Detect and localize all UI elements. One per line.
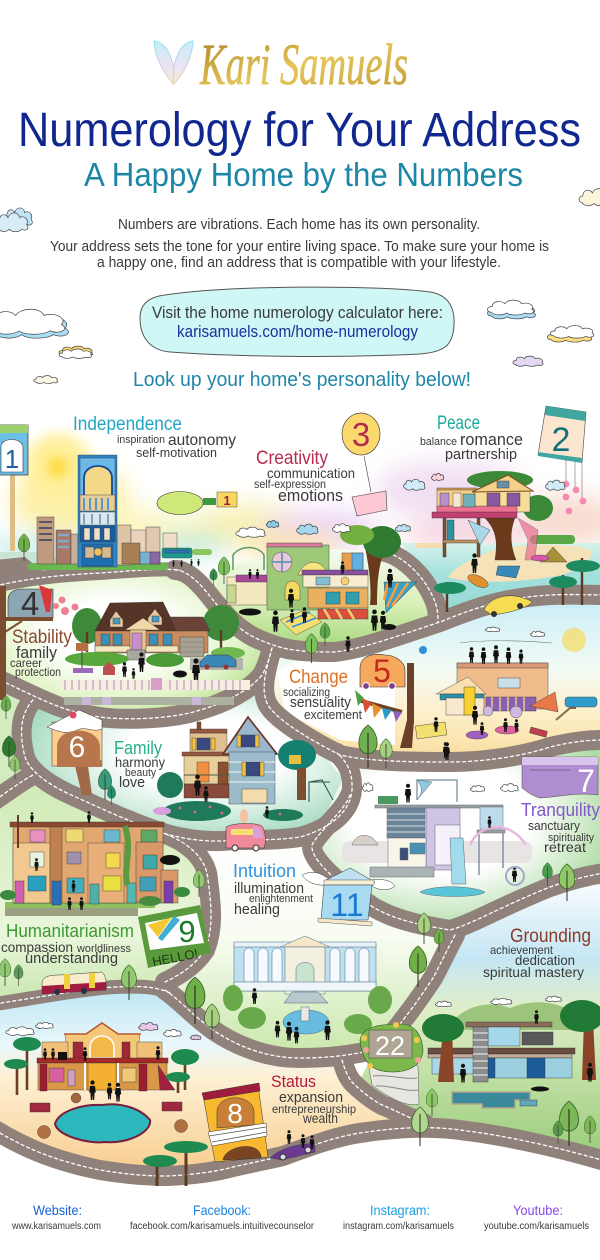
label: stability: [10, 627, 72, 679]
footer: instagram: [343, 1202, 454, 1232]
palace: intuition: [234, 936, 376, 1034]
label: peace: Peace: [437, 413, 480, 434]
trees and silhouettes: grounding: [412, 996, 600, 1146]
map: land patches: [0, 543, 600, 1176]
patch: grounding: [360, 873, 600, 1161]
trees: tranquility: [543, 863, 575, 901]
blimp with banner 1: 1: [223, 493, 231, 508]
label: grounding: dedication: [515, 952, 575, 968]
footer: website: Website:: [33, 1202, 82, 1218]
intro text: Numbers are vibrations. Each home has its own personality.: [118, 216, 480, 233]
island and tree house: peace: [415, 471, 591, 582]
sign 22: wreath and rock: [360, 1022, 423, 1105]
house: creativity: [227, 543, 417, 619]
sign 9: hello: HELLO!: [151, 946, 199, 969]
logo: Kari Samuels: [154, 32, 408, 97]
label: family: beauty: [125, 767, 156, 779]
label: intuition: Intuition: [233, 861, 296, 881]
label: status: Status: [271, 1072, 316, 1091]
patch: city ground: [0, 552, 180, 585]
sign 2: calendar: 2: [552, 421, 570, 459]
garden: intuition: [223, 985, 392, 1043]
callout: calculator link: karisamuels.com/home-numerology: [177, 322, 418, 341]
callout: calculator link: Visit the home numerology calculator here:: [152, 303, 443, 322]
label: independence: self-motivation: [136, 445, 217, 460]
tree: creativity: [340, 525, 401, 605]
footer: youtube: [484, 1202, 589, 1232]
patch: change white corner: [278, 657, 395, 745]
label: independence: [73, 414, 236, 460]
sign 11: winged columns: 11: [330, 887, 364, 923]
footer: facebook: facebook.com/karisamuels.intuitivecounselor: [130, 1221, 315, 1232]
label: tranquility: [521, 800, 600, 855]
label: change: [283, 667, 362, 722]
label: independence: Independence: [73, 414, 182, 435]
footer: website: www.karisamuels.com: [11, 1221, 101, 1232]
label: humanitarianism: compassion: [1, 939, 73, 955]
city: independence tower and buildings: [28, 455, 212, 570]
label: tranquility: spirituality: [548, 832, 594, 844]
roads: [0, 551, 600, 1176]
footer: instagram: instagram.com/karisamuels: [343, 1221, 454, 1232]
silhouettes and decor: change party: [419, 627, 586, 760]
label: change: excitement: [304, 707, 362, 722]
house: tranquility: [342, 780, 532, 896]
label: intuition: [233, 861, 313, 918]
label: independence: autonomy: [168, 432, 236, 449]
house: stability: [72, 602, 239, 660]
clouds in the sky: [0, 189, 600, 383]
callout: calculator link: [140, 287, 454, 356]
footer: links: [11, 1202, 589, 1232]
sign 8: status tower: 8: [227, 1098, 243, 1129]
patch: humanitarian: [0, 775, 208, 1004]
trees: left edge: [1, 696, 20, 779]
picnic mat and people: [239, 561, 396, 652]
logo wordmark: Kari Samuels: [199, 32, 408, 97]
sign 6: family: [47, 710, 102, 795]
label: grounding: spiritual mastery: [483, 964, 584, 980]
house: grounding: [428, 1002, 575, 1108]
label: grounding: Grounding: [510, 926, 591, 947]
bunting flags: [355, 690, 402, 722]
label: status: [271, 1072, 356, 1126]
sign 5: camper: 5: [373, 653, 391, 689]
label: family: Family: [114, 738, 162, 758]
label: grounding: [483, 926, 591, 980]
intro text: Your address sets the tone for your entire living space. To make sure your home is: [50, 238, 549, 255]
label: humanitarianism: worldliness: [76, 943, 131, 955]
sign 11: winged columns: [302, 868, 395, 926]
label: change: sensuality: [290, 694, 351, 711]
label: humanitarianism: understanding: [25, 950, 118, 967]
sign 4: mailbox: 4: [21, 585, 39, 622]
footer: youtube: youtube.com/karisamuels: [484, 1221, 589, 1232]
house: change: [415, 663, 597, 739]
label: change: Change: [289, 667, 348, 688]
label: peace: romance: [460, 430, 523, 449]
sign 1: post: [0, 425, 28, 551]
bus: [42, 972, 106, 995]
label: stability: protection: [15, 665, 61, 679]
label: creativity: self-expression: [254, 477, 326, 491]
label: status: entrepreneurship: [272, 1102, 356, 1116]
cyclist: [443, 742, 448, 758]
label: family: harmony: [115, 754, 165, 770]
palms and silhouettes: peace: [434, 553, 600, 612]
trees: change: [359, 725, 392, 768]
label: independence: inspiration: [117, 434, 165, 446]
sign 6: family: 6: [69, 731, 85, 764]
footer: facebook: [130, 1202, 315, 1232]
blimp with banner 1: [157, 492, 237, 514]
label: family: [114, 738, 165, 791]
sign 9: hello: 9: [178, 914, 196, 949]
intro text: [50, 216, 549, 271]
patch: family: [25, 690, 352, 842]
label: intuition: enlightenment: [249, 893, 313, 905]
label: peace: [420, 413, 523, 463]
sign 3: balloon and envelope: [342, 413, 387, 516]
label: stability: family: [16, 643, 57, 662]
patch: peace sea: [400, 543, 600, 622]
building: humanitarian: [5, 815, 178, 908]
sun: [24, 433, 92, 501]
house: family: [182, 717, 277, 804]
trees: creativity: [210, 557, 330, 663]
fence: [60, 678, 250, 690]
label: creativity: communication: [267, 465, 355, 481]
subtitle: A Happy Home by the Numbers: [84, 156, 523, 193]
label: peace: partnership: [445, 446, 517, 463]
patch: tranquility: [312, 740, 600, 930]
label: grounding: achievement: [490, 943, 554, 957]
label: creativity: [254, 448, 355, 505]
silhouettes: city walkers: [172, 559, 200, 567]
tree: city: [18, 534, 30, 561]
garden and car: stability: [60, 643, 250, 705]
label: creativity: Creativity: [256, 448, 328, 469]
ice-cream van: [226, 809, 265, 851]
sign 9: hello: [138, 905, 211, 969]
sign 2: calendar: [538, 406, 586, 514]
patch: change: [268, 595, 600, 762]
sign 5: camper: [355, 653, 414, 748]
label: tranquility: sanctuary: [528, 818, 580, 833]
label: change: socializing: [283, 687, 330, 699]
label: tranquility: retreat: [544, 839, 586, 855]
patch: status: [0, 987, 425, 1176]
footer: youtube: Youtube:: [513, 1202, 563, 1218]
planters and silhouettes: humanitarian: [0, 811, 190, 916]
sign 4: mailbox: [0, 585, 78, 700]
footer: facebook: Facebook:: [193, 1202, 251, 1218]
patch: left strip: [0, 680, 33, 800]
label: humanitarianism: [1, 921, 134, 967]
clouds and palms: status: [4, 1022, 208, 1186]
patch: intuition: [170, 837, 450, 1058]
label: creativity: emotions: [278, 486, 343, 505]
icon: wings: [154, 41, 193, 84]
sign 1: post: 1: [5, 444, 19, 474]
label: family: love: [119, 774, 145, 791]
car: purple: [270, 1130, 315, 1160]
label: status: wealth: [302, 1110, 338, 1126]
label: stability: Stability: [12, 627, 72, 648]
pavers: [64, 697, 234, 705]
footer: website: [11, 1202, 101, 1232]
footer: instagram: Instagram:: [370, 1202, 430, 1218]
patch: stability: [0, 572, 272, 717]
label: stability: career: [10, 656, 42, 670]
map: pastel sky wash: [0, 460, 600, 560]
sign 3: balloon and envelope: 3: [352, 416, 370, 453]
trees and garden: family: [98, 740, 333, 821]
sign 7: tranquility: [522, 757, 598, 799]
clouds: creativity and peace sky: [236, 473, 565, 537]
sign 22: wreath and rock: 22: [375, 1031, 405, 1061]
house: status: [30, 1023, 188, 1142]
sign 7: tranquility: 7: [577, 763, 595, 799]
heading: look up: Look up your home's personality below!: [133, 369, 471, 391]
label: intuition: healing: [234, 901, 280, 918]
trees: humanitarian: [0, 870, 205, 1000]
car: yellow: [484, 596, 532, 617]
trees: intuition: [185, 913, 444, 1039]
intro text: a happy one, find an address that is compatible with your lifestyle.: [97, 254, 501, 271]
road: left junction: [0, 557, 55, 590]
patch: creativity: [205, 550, 438, 652]
label: humanitarianism: Humanitarianism: [6, 921, 134, 941]
label: status: expansion: [279, 1089, 343, 1106]
label: peace: balance: [420, 436, 457, 448]
silhouettes and plants: tranquility: [362, 783, 524, 885]
label: intuition: illumination: [234, 880, 304, 897]
sign 8: status tower: [202, 1083, 268, 1162]
